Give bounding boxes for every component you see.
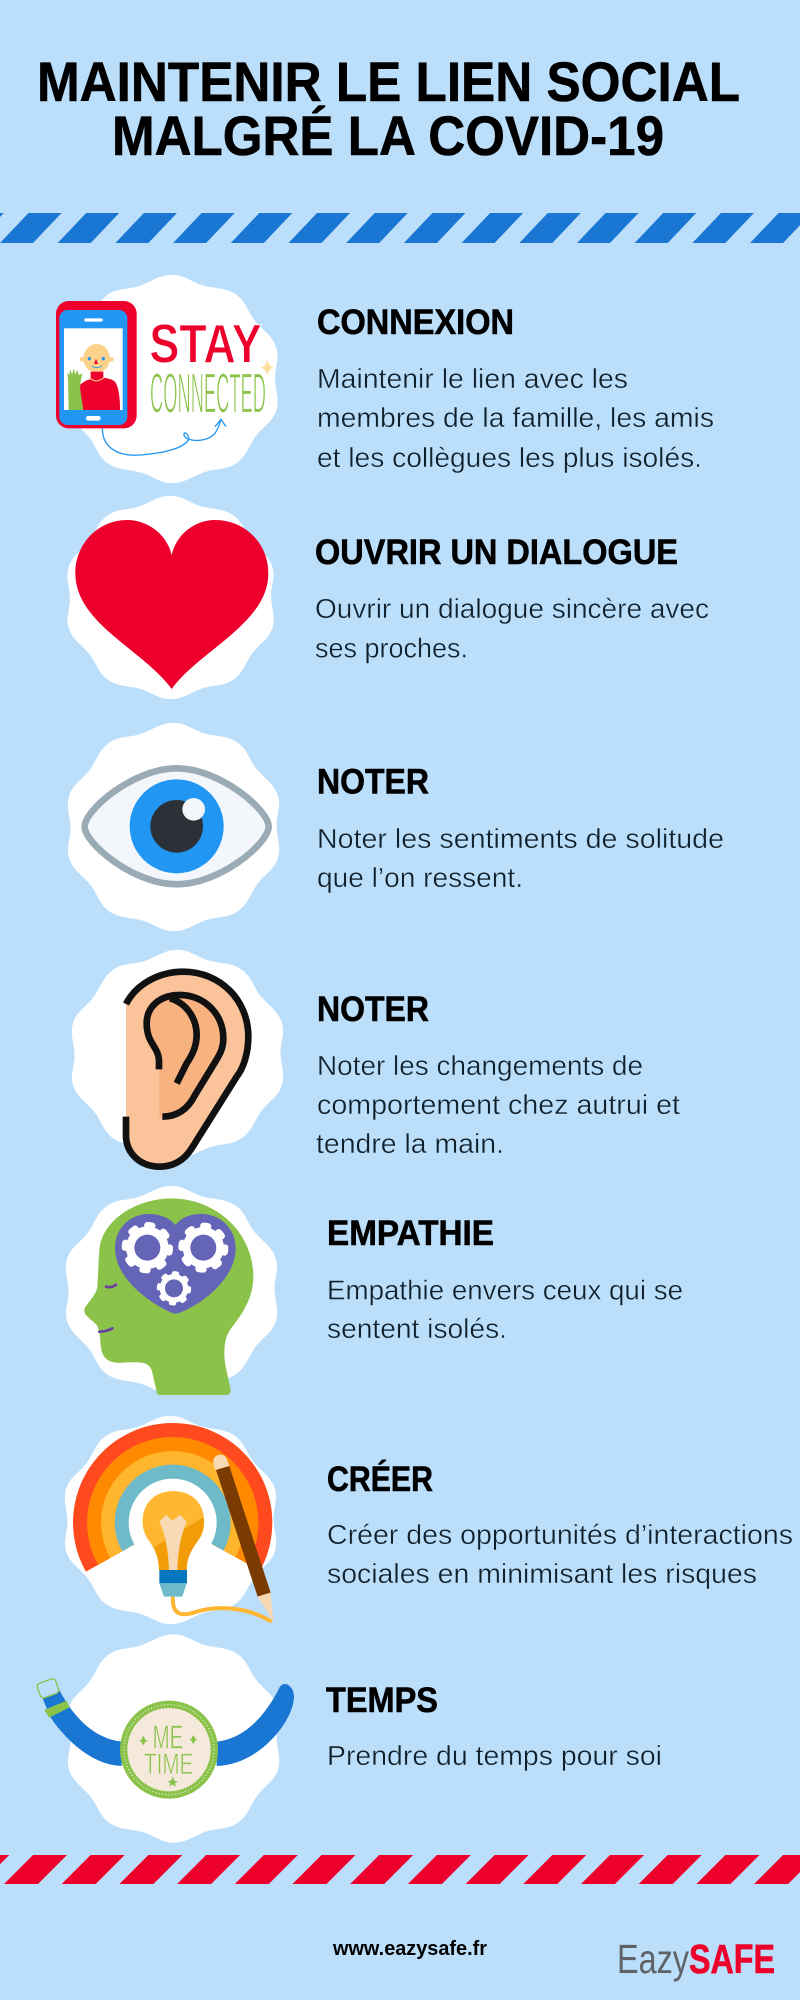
body text: Ouvrir un dialogue sincère avec <box>315 593 709 624</box>
panel: connexion: CONNECTED <box>150 362 266 426</box>
badge background <box>50 480 291 715</box>
heading: CONNEXION <box>317 302 514 342</box>
body text <box>316 1050 680 1159</box>
body text <box>317 823 724 893</box>
icon: rainbow, bulb and pencil <box>73 1423 273 1622</box>
body text <box>315 593 709 664</box>
badge background <box>48 1170 295 1410</box>
body text: membres de la famille, les amis <box>317 402 714 433</box>
panel: ouvrir un dialogue <box>50 480 709 715</box>
badge background <box>47 1400 294 1640</box>
title: MAINTENIR LE LIEN SOCIAL <box>37 50 740 113</box>
body text: Maintenir le lien avec les <box>317 363 628 394</box>
red striped divider <box>0 1855 800 1884</box>
body text: sentent isolés. <box>327 1313 507 1344</box>
body text: Empathie envers ceux qui se <box>327 1274 683 1306</box>
heading: CRÉER <box>327 1459 433 1499</box>
badge background <box>50 1618 297 1859</box>
panel: connexion <box>48 259 714 499</box>
icon: eye <box>85 768 269 884</box>
badge background <box>54 934 301 1174</box>
body text <box>327 1274 683 1344</box>
blue striped divider <box>0 213 800 243</box>
icon: stay connected phone: STAY <box>149 314 262 375</box>
body text: et les collègues les plus isolés. <box>317 442 702 473</box>
icon: head with gears <box>84 1198 253 1395</box>
panel: noter (yeux) <box>50 707 724 947</box>
body text <box>317 363 714 473</box>
title <box>37 50 740 167</box>
website url: www.eazysafe.fr <box>332 1938 487 1960</box>
heading: EMPATHIE <box>327 1213 494 1253</box>
panel: empathie <box>48 1170 683 1410</box>
heading: NOTER <box>317 762 429 802</box>
body text: comportement chez autrui et <box>317 1089 680 1120</box>
body text: Noter les changements de <box>317 1050 643 1081</box>
panel: temps <box>36 1618 662 1859</box>
body text: Prendre du temps pour soi <box>327 1740 662 1771</box>
heading: OUVRIR UN DIALOGUE <box>315 532 678 572</box>
logo: EazySAFE: Eazy <box>617 1936 689 1982</box>
panel: créer <box>47 1400 793 1640</box>
icon: me time watch: TIME <box>144 1748 193 1781</box>
logo: EazySAFE <box>617 1936 775 1982</box>
icon: stay connected phone <box>56 301 274 455</box>
body text: sociales en minimisant les risques <box>327 1558 757 1589</box>
body text: Noter les sentiments de solitude <box>317 823 724 854</box>
heading: NOTER <box>317 989 429 1029</box>
icon: me time watch <box>36 1678 294 1799</box>
body text: Créer des opportunités d’interactions <box>327 1519 793 1550</box>
body text: ses proches. <box>315 632 468 664</box>
icon: heart <box>75 520 268 689</box>
body text: tendre la main. <box>316 1128 504 1159</box>
badge background <box>50 707 297 947</box>
heading: TEMPS <box>326 1680 438 1720</box>
body text <box>327 1519 793 1589</box>
logo: EazySAFE: SAFE <box>689 1936 775 1982</box>
icon: me time watch: ME <box>153 1719 183 1756</box>
icon: ear <box>126 972 248 1167</box>
panel: noter (oreille) <box>54 934 680 1174</box>
badge background <box>48 259 296 499</box>
body text: que l’on ressent. <box>317 862 523 893</box>
title: MALGRÉ LA COVID-19 <box>112 104 664 167</box>
